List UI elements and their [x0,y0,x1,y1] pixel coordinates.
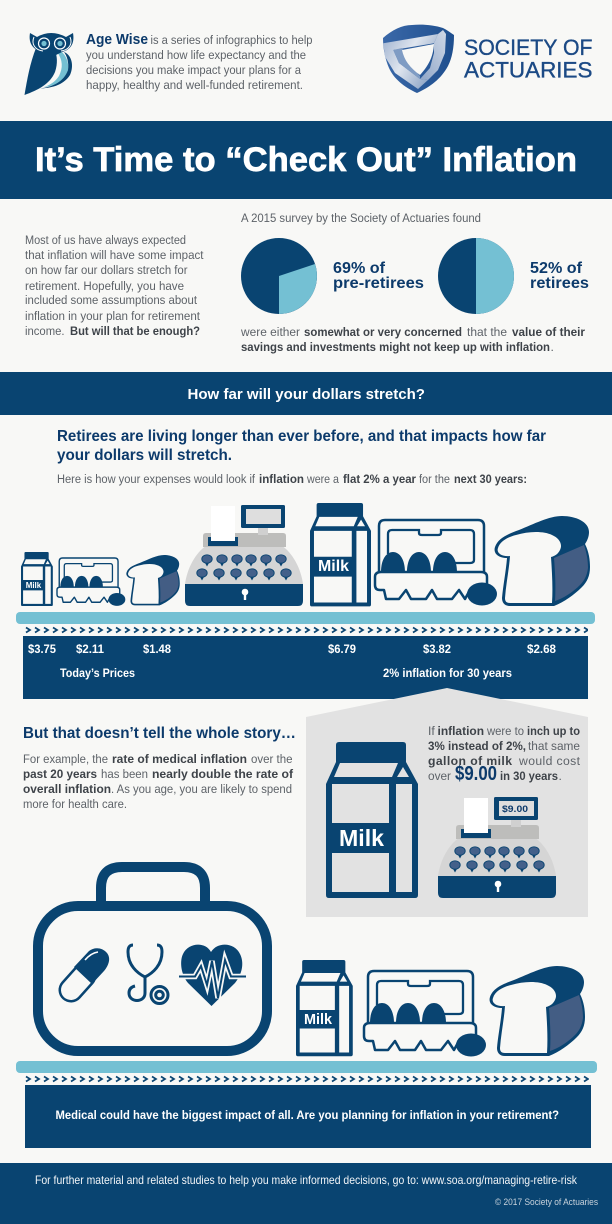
survey conclusion text: somewhat or very concerned [304,325,462,339]
closing question panel [25,1085,591,1148]
survey conclusion text: . [550,340,554,354]
prices today: $3.75 [28,644,57,656]
icon: cash register showing $9.00: $9.00 [502,804,528,815]
prices after inflation [328,644,557,680]
icon: pill [71,948,109,990]
title banner [0,121,612,199]
icon: cash register [185,505,303,606]
flat 2% explanation: for the [419,472,450,486]
callout text: were to [486,724,524,738]
callout text: that same [528,739,580,753]
subheading [57,428,546,464]
callout text [428,724,581,785]
icon: medium milk carton: Milk [318,558,349,575]
label: 69% of pre-retirees [333,260,424,292]
intro paragraph: on how far our dollars stretch for [25,263,188,277]
section banner: How far will your dollars stretch? [0,372,612,415]
logo wordmark [464,35,592,83]
intro paragraph [25,233,204,338]
medical inflation paragraph: more for health care. [23,797,127,811]
prices after inflation: $3.82 [423,644,451,656]
logo wordmark: ACTUARIES [464,58,592,83]
medical inflation paragraph: has been [101,767,148,781]
label: 69% of pre-retirees: pre-retirees [333,275,424,292]
callout text: would cost [518,754,581,768]
bottom counter belt [16,1061,597,1073]
intro paragraph: that inflation will have some impact [25,248,204,262]
flat 2% explanation: flat 2% a year [343,472,416,486]
callout text: over [428,769,451,783]
intro text: Age Wise [86,32,313,92]
medical inflation paragraph: overall inflation [23,782,111,796]
closing question panel: Medical could have the biggest impact of all. Are you planning for inflation in your retirement? [56,1108,559,1122]
label: 52% of retirees [530,260,589,292]
icon: large milk carton [326,742,418,898]
callout text: $9.00 [455,763,497,785]
heading: But that doesn't tell the whole story: But that doesn’t tell the whole story… [23,725,296,742]
icon: bottom eggs [364,971,486,1056]
prices after inflation: $2.68 [527,644,557,656]
flat 2% explanation [57,472,527,486]
pie chart: 69% of pre-retirees [241,238,317,314]
label: 69% of pre-retirees: 69% of [333,260,386,277]
icon: medium eggs [375,520,497,606]
callout panel: 3% inflation [306,688,588,917]
medical inflation paragraph: . As you age, you are likely to spend [111,782,292,796]
intro text: Age Wise: is a series of infographics to help [150,33,313,47]
callout text: inch up to [527,724,580,738]
icon: large milk carton: Milk [339,825,384,851]
chevron row [25,626,588,634]
intro text: Age Wise: decisions you make impact your plans for a [86,63,301,77]
flat 2% explanation: next 30 years: [454,472,527,486]
label: 52% of retirees: retirees [530,275,589,292]
subheading: your dollars will stretch. [57,447,232,464]
icon: owl logo [24,33,73,95]
callout text: . [558,769,562,783]
intro paragraph: Most of us have always expected [25,233,186,247]
medical inflation paragraph: For example, the [23,752,108,766]
flat 2% explanation: were a [306,472,339,486]
icon: bottom milk carton [296,960,353,1056]
medical inflation paragraph: over the [251,752,293,766]
survey conclusion text: savings and investments might not keep up with inflation [241,340,550,354]
prices today: Today’s Prices [60,668,135,680]
intro text: Age Wise: happy, healthy and well-funded retirement. [86,78,303,92]
footer: © 2017 Society of Actuaries [495,1197,598,1208]
callout text: in 30 years [500,769,558,783]
icon: small eggs [57,558,125,606]
intro paragraph: income. [25,324,64,338]
survey conclusion text: that the [467,325,507,339]
intro paragraph: But will that be enough? [70,324,200,338]
flat 2% explanation: Here is how your expenses would look if [57,472,256,486]
icon: bottom milk carton: Milk [304,1012,333,1028]
intro text: Age Wise: you understand how life expectancy and the [86,48,306,62]
icon: small bread [126,555,180,605]
prices today [28,644,172,680]
icon: stethoscope [128,945,168,1004]
icon: medium bread [495,516,590,606]
flat 2% explanation: inflation [259,472,304,486]
title banner: It’s Time to “Check Out” Inflation [35,141,577,179]
icon: Society of Actuaries shield [383,25,454,93]
icon: small milk carton [21,552,53,606]
icon: medical bag [38,867,267,1051]
prices after inflation: $6.79 [328,644,356,656]
section banner: How far will your dollars stretch?: How far will your dollars stretch? [188,386,425,403]
callout text: gallon of milk [428,754,512,768]
survey conclusion text: value of their [512,325,585,339]
intro paragraph: inflation in your plan for retirement [25,309,201,323]
intro paragraph: retirement. Hopefully, you have [25,279,184,293]
counter belt [16,612,595,624]
medical inflation paragraph: past 20 years [23,767,97,781]
survey conclusion text [240,325,585,354]
survey conclusion text: were either [240,325,300,339]
prices after inflation: 2% inflation for 30 years [383,668,512,680]
prices today: $1.48 [143,644,172,656]
intro paragraph: included some assumptions about [25,293,198,307]
bottom chevron row [25,1075,589,1083]
subheading: Retirees are living longer than ever before, and that impacts how far [57,428,546,445]
logo wordmark: SOCIETY OF [464,35,592,60]
price panel [23,636,588,699]
pie chart: 52% of retirees [438,238,514,314]
medical inflation paragraph [23,752,294,811]
survey intro line: A 2015 survey by the Society of Actuaries found [241,211,481,225]
callout text: If [428,724,435,738]
icon: cash register showing $9.00 [438,797,556,898]
footer [0,1163,612,1224]
icon: small milk carton: Milk [26,581,42,590]
icon: bottom bread [490,966,585,1056]
medical inflation paragraph: rate of medical inflation [112,752,247,766]
callout text: inflation [438,724,484,738]
label: 52% of retirees: 52% of [530,260,583,277]
icon: heart with pulse [179,945,246,1006]
prices today: $2.11 [76,644,105,656]
callout text: 3% instead of 2%, [428,739,526,753]
intro text: Age Wise: Age Wise [86,32,148,48]
medical inflation paragraph: nearly double the rate of [152,767,294,781]
icon: medium milk carton [310,503,371,606]
